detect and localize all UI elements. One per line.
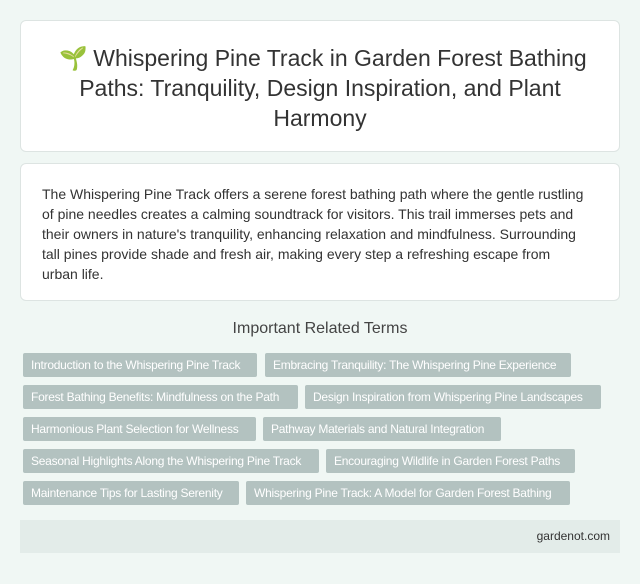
footer text: gardenot.com [537, 529, 610, 543]
tag [305, 385, 601, 409]
tag [23, 353, 257, 377]
tag [263, 417, 501, 441]
title: Whispering Pine Track in Garden Forest Bathing Paths: Tranquility, Design Inspiration, and Plant Harmony [79, 45, 587, 131]
tag: Encouraging Wildlife in Garden Forest Paths [334, 454, 560, 468]
description text: The Whispering Pine Track offers a serene forest bathing path where the gentle rustling [42, 186, 583, 202]
tag: Introduction to the Whispering Pine Track [31, 358, 240, 372]
description text: urban life. [42, 266, 103, 282]
icon: seedling: 🌱 [59, 45, 88, 71]
tag: Design Inspiration from Whispering Pine Landscapes [313, 390, 583, 404]
tag [265, 353, 571, 377]
description card [20, 163, 620, 301]
tag [246, 481, 570, 505]
footer [20, 520, 620, 553]
tag [326, 449, 575, 473]
tag [23, 417, 256, 441]
description text: of pine needles creates a calming soundtrack for visitors. This trail immerses pets and [42, 206, 573, 222]
tag: Seasonal Highlights Along the Whispering Pine Track [31, 454, 301, 468]
title card [20, 20, 620, 152]
heading: related terms: Important Related Terms [233, 320, 407, 337]
tag: Whispering Pine Track: A Model for Garden Forest Bathing [254, 486, 551, 500]
tag [23, 385, 298, 409]
tag: Forest Bathing Benefits: Mindfulness on the Path [31, 390, 279, 404]
description text: their owners in nature's tranquility, enhancing relaxation and mindfulness. Surrounding [42, 226, 576, 242]
description text [42, 186, 583, 282]
tag: Pathway Materials and Natural Integration [271, 422, 484, 436]
tag [23, 481, 239, 505]
description text: tall pines provide shade and fresh air, making every step a refreshing escape from [42, 246, 550, 262]
tag [23, 449, 319, 473]
tag: Harmonious Plant Selection for Wellness [31, 422, 238, 436]
tag: Embracing Tranquility: The Whispering Pine Experience [273, 358, 556, 372]
tag: Maintenance Tips for Lasting Serenity [31, 486, 223, 500]
